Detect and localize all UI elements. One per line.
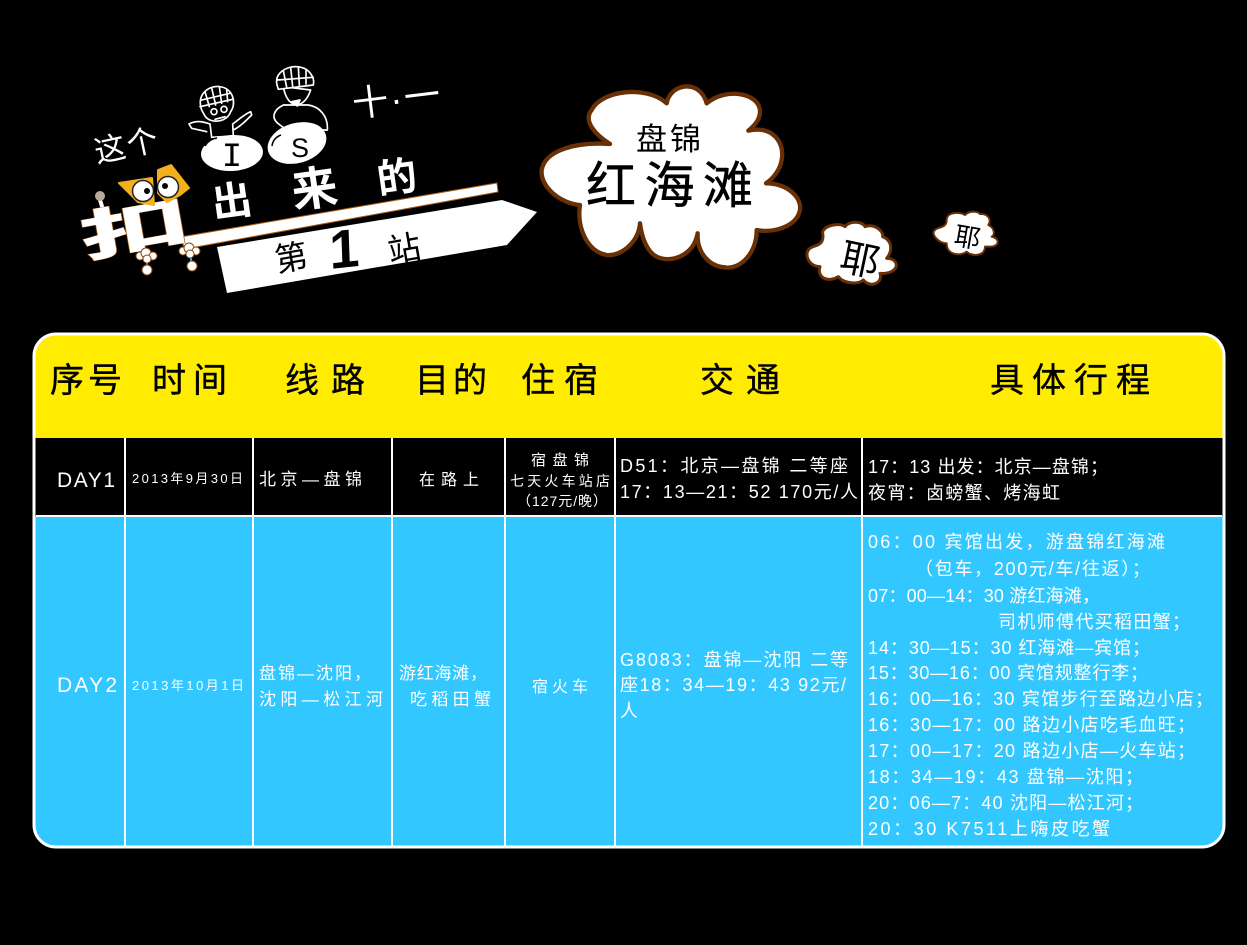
title text: 这个: 这个	[91, 122, 161, 170]
row: day 2: 2013年10月1日	[132, 678, 244, 693]
itinerary table	[34, 334, 1224, 847]
badge: I: I	[222, 139, 242, 177]
header band	[34, 334, 1224, 439]
cloud text: 盘锦: 盘锦	[636, 122, 701, 157]
badge: S: S	[291, 133, 309, 163]
table background	[34, 334, 1224, 847]
detailed itinerary: 20：06—7：40 沈阳—松江河；	[868, 793, 1143, 813]
icon: cyclist right	[274, 67, 327, 130]
row: day 1: D51：北京—盘锦 二等座	[620, 456, 848, 476]
detailed itinerary: 15：30—16：00 宾馆规整行李；	[868, 663, 1148, 683]
row: day 1: 在路上	[419, 471, 479, 489]
detailed itinerary: 17：00—17：20 路边小店—火车站；	[868, 741, 1195, 761]
arrow ribbon	[217, 200, 537, 293]
title text: 出来的: 来	[288, 160, 341, 218]
icon: little flowers	[136, 243, 200, 275]
cloud: 耶 small: 耶	[952, 220, 983, 254]
table header labels: 目的	[415, 362, 487, 400]
cloud: 耶 large: 耶	[836, 236, 883, 286]
title bar	[180, 183, 498, 249]
detailed itinerary: 06：00 宾馆出发，游盘锦红海滩	[868, 532, 1165, 552]
ribbon text: 第1站: 站	[385, 228, 424, 270]
table header labels: 序号	[50, 362, 122, 400]
detailed itinerary: 14：30—15：30 红海滩—宾馆；	[868, 638, 1150, 658]
table rules	[36, 438, 1222, 846]
badge: I	[200, 133, 264, 177]
row: day 2: DAY2	[57, 674, 117, 697]
row: day 2: 座18：34—19：43 92元/	[620, 675, 846, 695]
row: day 2: G8083：盘锦—沈阳 二等	[620, 650, 848, 670]
ribbon text: 第1站	[272, 218, 424, 281]
ribbon text: 第1站: 第	[272, 237, 311, 279]
title text: 扣: 扣	[77, 191, 193, 269]
icon: cyclist left	[189, 86, 252, 137]
row: day 1: 17：13—21：52 170元/人	[620, 482, 858, 502]
detailed itinerary: 20：30 K7511上嗨皮吃蟹	[868, 819, 1110, 839]
row: day 1: 17：13 出发：北京—盘锦；	[868, 457, 1108, 477]
table outline	[34, 334, 1224, 847]
cloud: 耶 small	[933, 212, 998, 255]
row: day 2	[57, 650, 848, 721]
row: day 2: 游红海滩，	[399, 664, 487, 683]
row: day 2: 人	[620, 701, 638, 721]
cloud: 耶 large	[807, 222, 896, 286]
icon: little hand	[95, 191, 106, 219]
title text: 出来的	[209, 154, 420, 227]
row: day 2: 沈阳—松江河	[259, 690, 383, 709]
table header labels	[50, 362, 1150, 400]
ribbon text: 第1站: 1	[328, 218, 360, 281]
detailed itinerary: （包车，200元/车/往返）；	[915, 559, 1150, 579]
row: day 1: 2013年9月30日	[132, 471, 243, 486]
title graphic	[77, 67, 537, 293]
table header labels: 时间	[152, 362, 227, 400]
row: day 2: 盘锦—沈阳，	[259, 664, 371, 683]
detailed itinerary: 07：00—14：30 游红海滩，	[868, 586, 1100, 606]
detailed itinerary	[868, 532, 1213, 839]
cloud text: 红海滩: 红海滩	[586, 158, 753, 214]
row: day 1: 七天火车站店	[510, 473, 610, 489]
detailed itinerary: 18：34—19：43 盘锦—沈阳；	[868, 767, 1143, 787]
row: day 1	[57, 451, 1108, 509]
detailed itinerary: 16：00—16：30 宾馆步行至路边小店；	[868, 689, 1213, 709]
row: day 2: 宿火车	[532, 678, 588, 696]
table header labels: 住宿	[521, 362, 598, 400]
detailed itinerary: 16：30—17：00 路边小店吃毛血旺；	[868, 715, 1195, 735]
row: day 1: 夜宵：卤螃蟹、烤海虹	[868, 483, 1060, 503]
table header labels: 交通	[700, 362, 780, 400]
row: day 1: 北京—盘锦	[259, 470, 362, 489]
row: day 1: 宿盘锦	[531, 451, 589, 469]
row: day 1: （127元/晚）	[517, 493, 607, 509]
cloud: 盘锦红海滩	[542, 86, 800, 268]
title text: 扣: 扣	[77, 191, 193, 269]
title text: 出来的: 的	[374, 154, 420, 203]
table header labels: 具体行程	[990, 362, 1150, 400]
title text: 出来的: 出	[209, 178, 255, 227]
detailed itinerary: 司机师傅代买稻田蟹；	[998, 612, 1190, 632]
row: day 1: DAY1	[57, 469, 115, 492]
icon: yellow eyes	[119, 165, 189, 205]
title text: 十·一: 十·一	[350, 74, 442, 125]
table header labels: 线路	[285, 362, 365, 400]
badge: S	[263, 116, 331, 170]
row: day 2: 吃稻田蟹	[410, 690, 491, 709]
day 1 band	[34, 438, 1224, 516]
